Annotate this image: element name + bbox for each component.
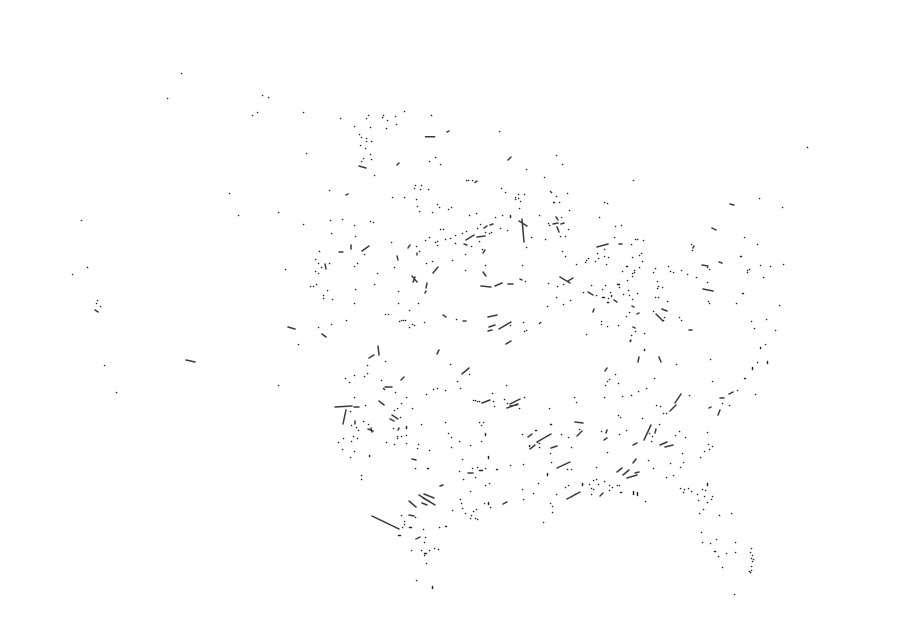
line segments [95, 131, 734, 539]
point markers [72, 74, 808, 594]
